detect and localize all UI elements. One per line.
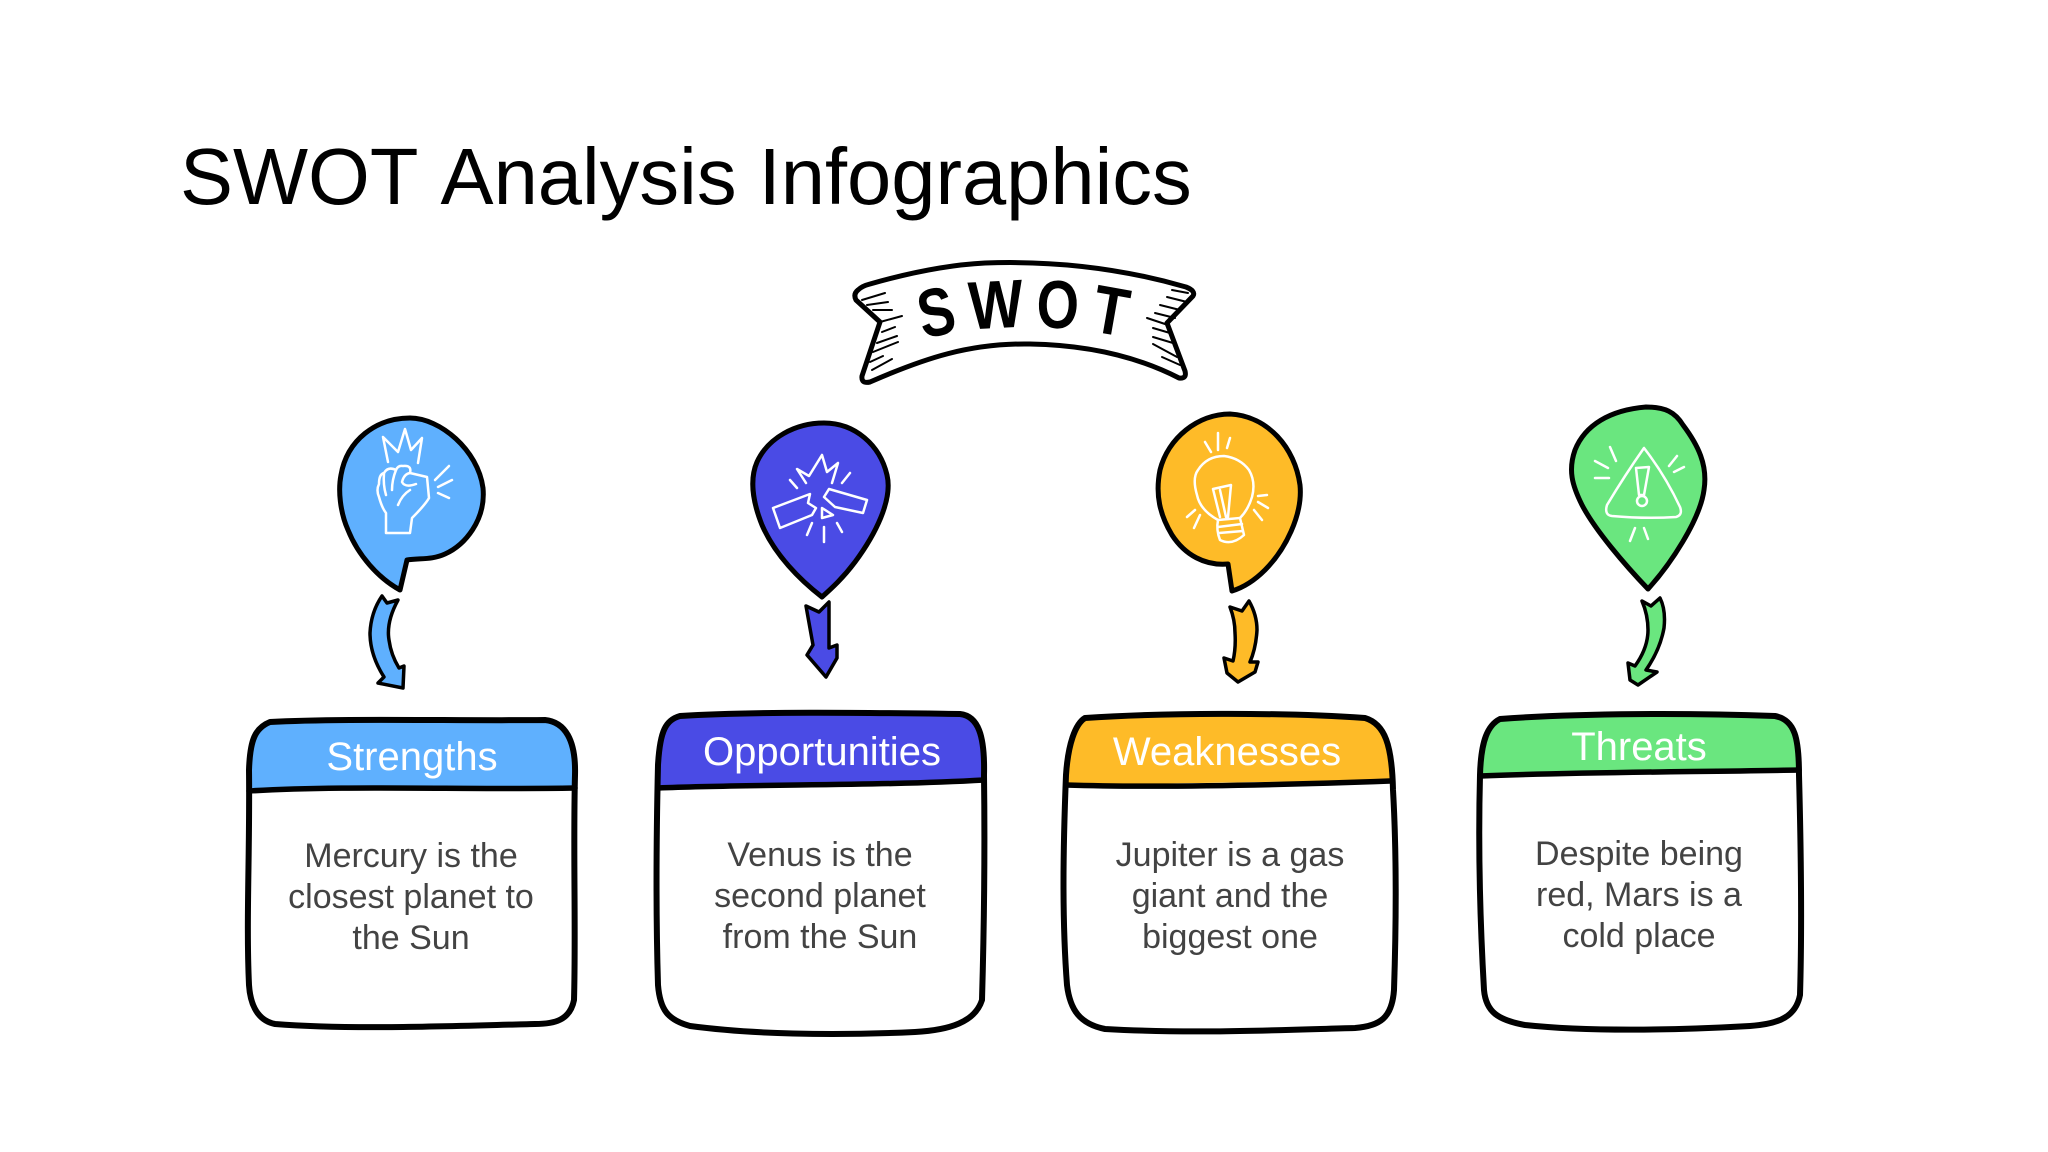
arrow: weaknesses	[1224, 601, 1258, 682]
balloon: strengths	[340, 418, 483, 590]
banner: SWOT ribbon: T	[1087, 272, 1135, 352]
heading: strengths: Strengths	[326, 735, 498, 779]
text: threats: cold place	[1562, 917, 1716, 955]
arrow: strengths	[370, 596, 404, 688]
icon: raised fist	[378, 429, 452, 533]
text: strengths: Mercury is the	[304, 837, 518, 875]
text: weaknesses: giant and the	[1132, 877, 1328, 915]
heading: weaknesses: Weaknesses	[1113, 730, 1341, 774]
icon: warning triangle	[1595, 447, 1684, 541]
balloon: threats	[1571, 407, 1705, 589]
heading: threats: Threats	[1571, 725, 1707, 769]
card: weaknesses	[1064, 714, 1396, 1031]
balloon: weaknesses	[1158, 414, 1300, 591]
text: opportunities: Venus is the	[727, 836, 913, 874]
heading: opportunities: Opportunities	[703, 730, 941, 774]
arrow: opportunities	[806, 602, 837, 677]
icon: light bulb	[1187, 433, 1268, 542]
text: weaknesses: biggest one	[1142, 918, 1318, 956]
text: opportunities: second planet	[714, 877, 926, 915]
title: SWOT Analysis Infographics	[180, 132, 1192, 221]
banner: SWOT ribbon	[855, 263, 1194, 382]
card: strengths	[248, 720, 576, 1027]
card: opportunities	[656, 713, 984, 1034]
icon: broken object	[773, 455, 867, 542]
card: threats	[1479, 714, 1801, 1030]
text: opportunities: from the Sun	[723, 918, 917, 956]
balloon: opportunities	[753, 423, 888, 597]
arrow: threats	[1628, 598, 1664, 685]
banner: SWOT ribbon: O	[1035, 267, 1080, 344]
text: weaknesses: Jupiter is a gas	[1116, 836, 1344, 874]
text: threats: red, Mars is a	[1536, 876, 1742, 914]
text: strengths: the Sun	[352, 919, 470, 957]
text: strengths: closest planet to	[288, 878, 534, 916]
text: threats: Despite being	[1535, 835, 1743, 873]
banner: SWOT ribbon: S	[911, 272, 962, 354]
banner: SWOT ribbon: W	[967, 266, 1025, 344]
